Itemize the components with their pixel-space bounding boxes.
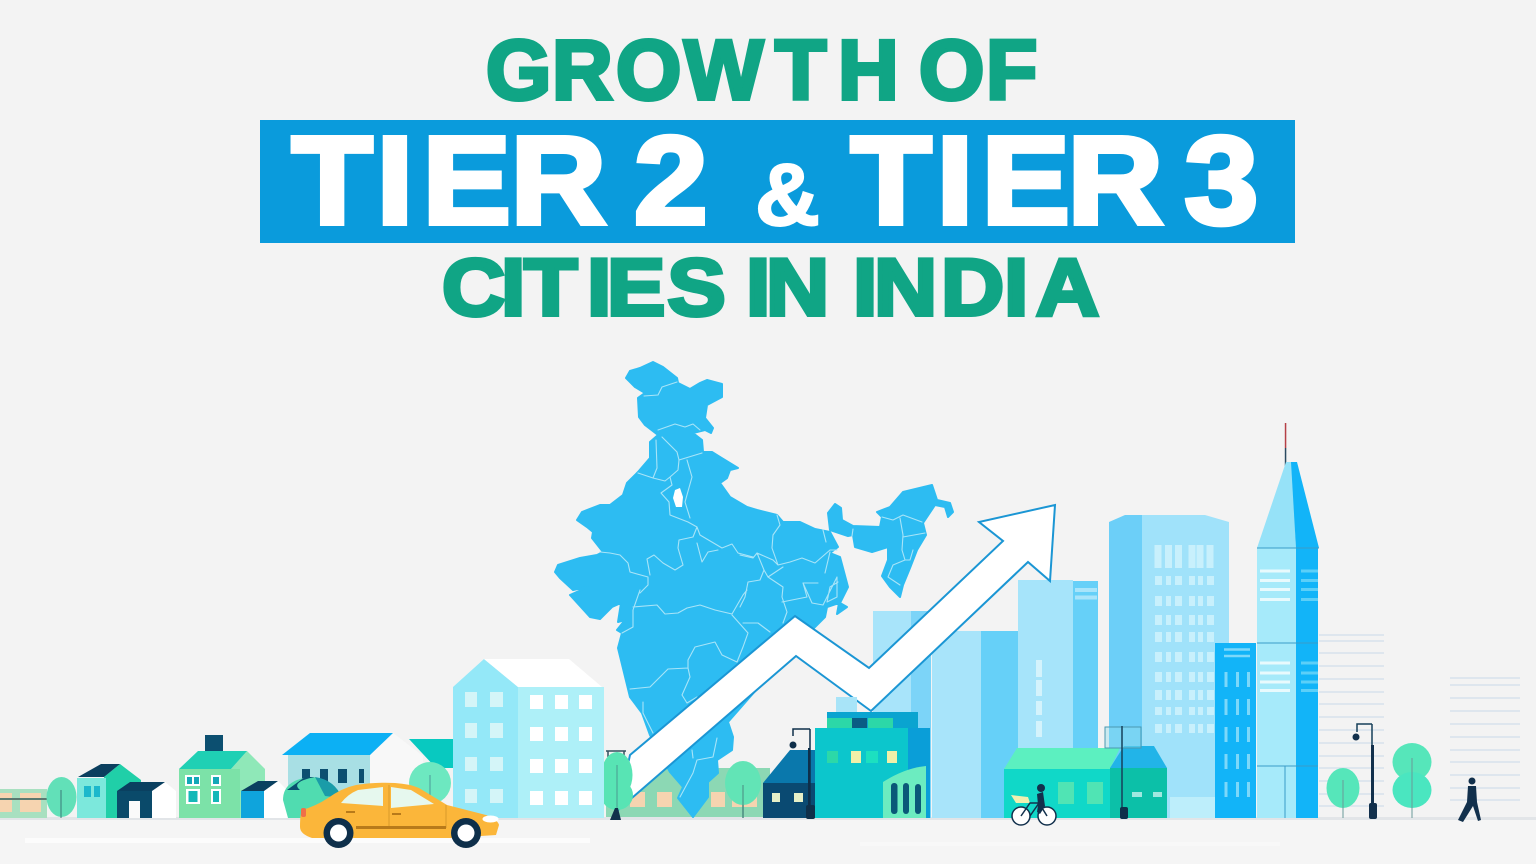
spire tower: [1257, 423, 1319, 818]
tree near map tip: [725, 761, 761, 818]
house E blue roof: [282, 733, 423, 797]
block tall: [1018, 580, 1098, 818]
blue tower: [1215, 643, 1256, 818]
background faint lined building right: [1450, 678, 1520, 800]
cyclist: [1011, 784, 1056, 825]
block far left: [873, 611, 931, 818]
street lamp 1: [790, 729, 815, 819]
banner: [260, 120, 1295, 243]
heading: tier 2: TIER 2: [292, 111, 708, 251]
office building teal: [815, 697, 930, 818]
round tower: [1109, 515, 1229, 818]
heading: ampersand: &: [755, 145, 820, 244]
street lamp 2: [1105, 726, 1141, 819]
tree with lamp at arrow base: [601, 751, 633, 820]
title: [260, 23, 1295, 332]
taxi car: [300, 783, 499, 848]
block middle: [932, 631, 1018, 818]
house A: [77, 764, 141, 818]
skyline: back blocks: [873, 580, 1098, 818]
background faint lined building: [1319, 635, 1384, 806]
left strip row houses: [0, 789, 47, 818]
street lamp 3: [1352, 724, 1377, 819]
house D: [241, 781, 288, 818]
house B: [117, 782, 176, 818]
tree small right: [1326, 768, 1360, 818]
heading: growth of: GROWTH OF: [486, 23, 1037, 117]
shrub with roof: [283, 777, 342, 818]
growth arrow: [618, 505, 1055, 810]
house C: [179, 735, 265, 818]
house: dark blue: [763, 750, 815, 818]
heading: cities in india: CITIES IN INDIA: [442, 242, 1099, 332]
back row strip behind map: [606, 768, 770, 817]
map of India: [555, 362, 953, 817]
ground: [0, 817, 1536, 864]
tree behind car: [409, 762, 451, 804]
teal back roof: [409, 739, 454, 768]
heading: tier 3: TIER 3: [851, 111, 1258, 251]
pedestrian: [1458, 778, 1481, 822]
tree tall right: [1392, 743, 1432, 818]
tree far left: [46, 777, 76, 818]
green-roof house: [1004, 746, 1167, 818]
building F: [453, 659, 604, 818]
